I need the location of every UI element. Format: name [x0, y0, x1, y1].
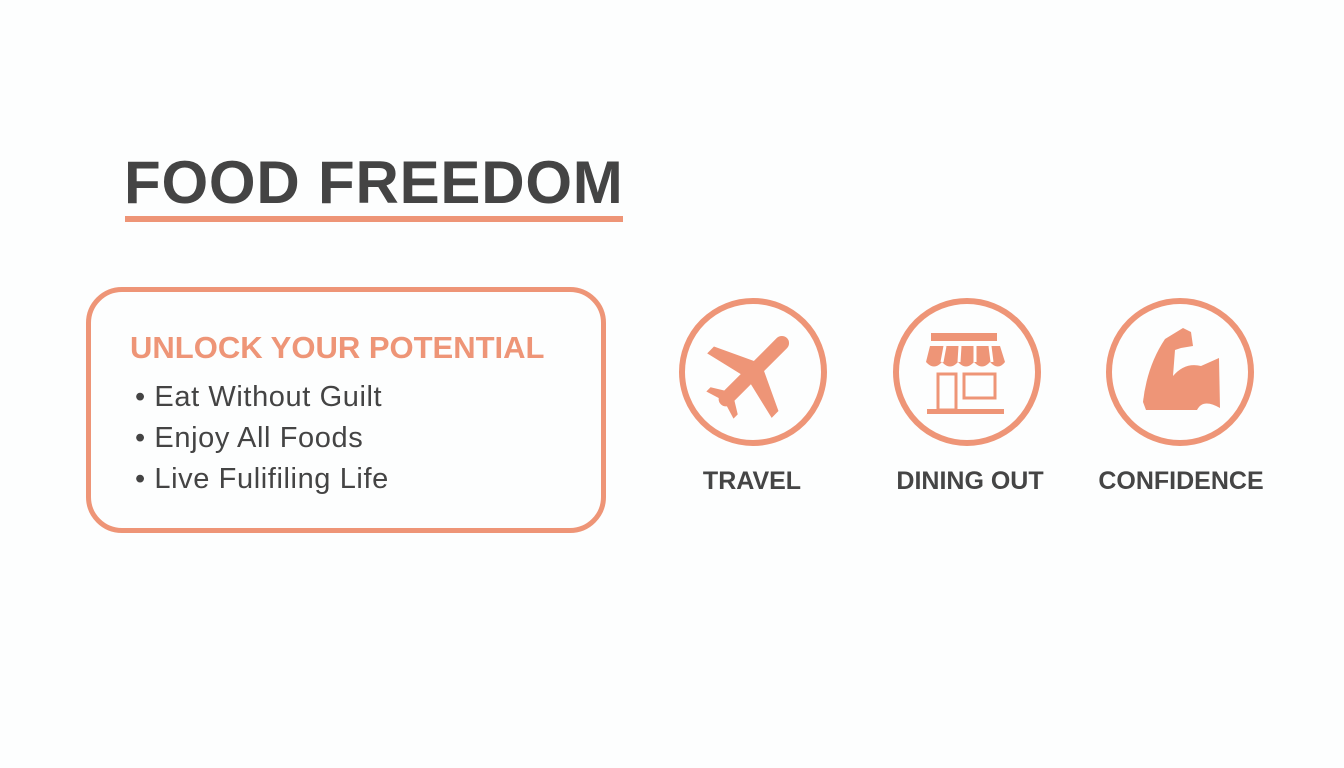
panel: unlock your potential — [86, 287, 606, 533]
icon: travel — [679, 298, 827, 446]
label: confidence: CONFIDENCE — [1098, 467, 1264, 495]
title: FOOD FREEDOM — [124, 149, 624, 216]
bullet list: • Live Fulifiling Life — [135, 463, 389, 495]
label: travel: TRAVEL — [703, 467, 801, 495]
icon: dining out — [893, 298, 1041, 446]
bullet list — [135, 381, 389, 495]
icon: confidence — [1106, 298, 1254, 446]
bullet list: • Eat Without Guilt — [135, 381, 382, 413]
heading: UNLOCK YOUR POTENTIAL — [130, 330, 544, 365]
label: dining out: DINING OUT — [896, 467, 1044, 495]
bullet list: • Enjoy All Foods — [135, 422, 363, 454]
